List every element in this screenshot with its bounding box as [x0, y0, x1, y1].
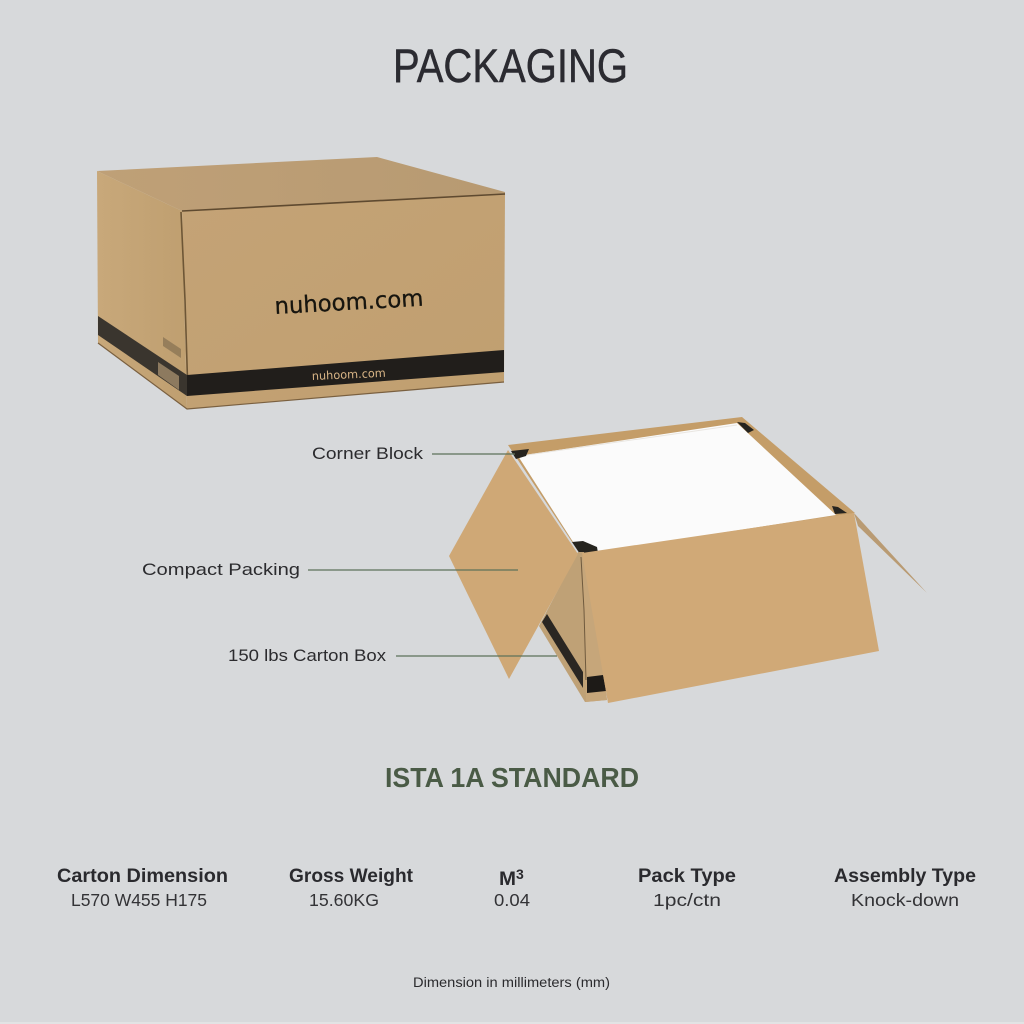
spec: assembly type	[834, 866, 976, 910]
spec: pack type: 1pc/ctn	[653, 890, 721, 910]
side wall	[539, 552, 607, 702]
spec: pack type	[638, 866, 736, 910]
back rim	[508, 417, 855, 554]
spec: pack type: Pack Type	[638, 866, 736, 887]
label: compact packing: Compact Packing	[142, 560, 300, 579]
spec: volume	[494, 866, 530, 910]
spec: carton dimension	[57, 866, 228, 910]
spec: gross weight: Gross Weight	[289, 866, 414, 887]
left flap	[449, 450, 578, 679]
white foam	[518, 423, 836, 552]
heading: ISTA 1A standard: ISTA 1A STANDARD	[385, 762, 639, 793]
spec: carton dimension: Carton Dimension	[57, 866, 228, 887]
side panel print	[158, 337, 181, 390]
spec: volume: 3	[516, 866, 524, 882]
leader line: corner block	[432, 453, 515, 455]
spec: gross weight	[289, 866, 414, 910]
spec: volume: 0.04	[494, 890, 530, 910]
title: PACKAGING	[393, 39, 628, 92]
front flap	[582, 513, 879, 703]
right flap	[854, 513, 927, 593]
spec: gross weight: 15.60KG	[309, 890, 379, 910]
corner blocks	[511, 422, 847, 554]
spec: assembly type: Knock-down	[851, 890, 959, 910]
open carton box	[449, 417, 927, 703]
leader line: carton box	[396, 655, 557, 657]
box logo: nuhoom.com	[274, 286, 424, 320]
closed carton box	[97, 157, 505, 409]
band logo: nuhoom.com	[312, 366, 386, 383]
label: corner block: Corner Block	[312, 444, 424, 463]
spec: volume: M	[499, 869, 516, 890]
spec: carton dimension: L570 W455 H175	[71, 890, 207, 910]
leader line: compact packing	[308, 569, 518, 571]
footnote: Dimension in millimeters (mm)	[413, 975, 610, 990]
spec: assembly type: Assembly Type	[834, 866, 976, 887]
label: 150 lbs carton box: 150 lbs Carton Box	[228, 646, 387, 665]
